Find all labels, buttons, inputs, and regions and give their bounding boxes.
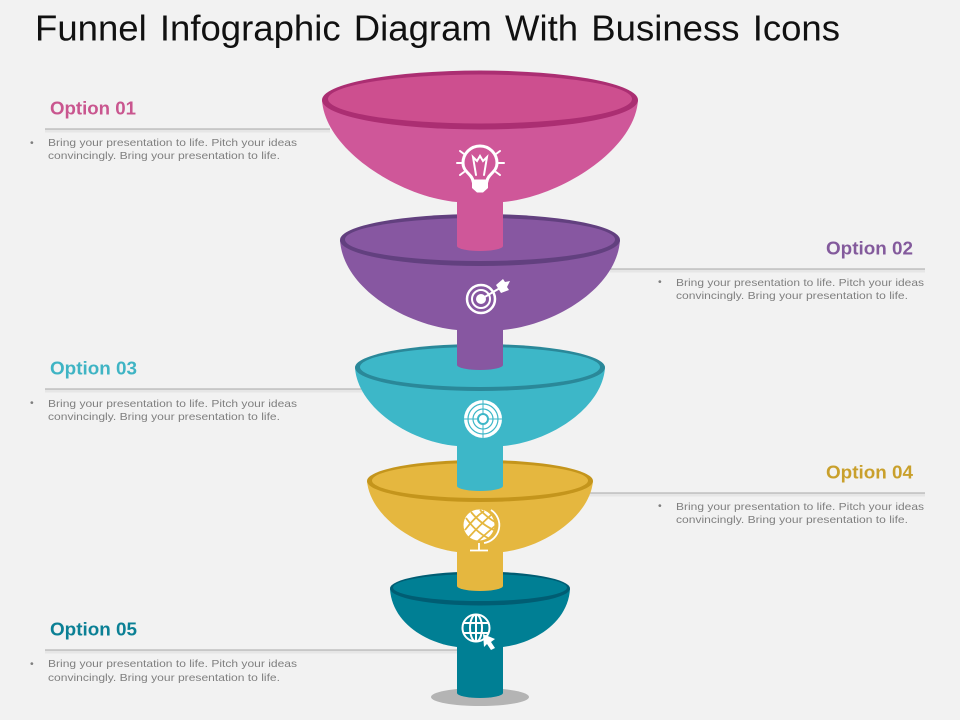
panel: option 01 text: convincingly. Bring your presentation to life. [48,150,280,162]
panel: option 05 text [30,620,460,684]
panel: option 05 text: Option 05 [50,620,137,640]
panel: option 03 text: Bring your presentation to life. Pitch your ideas [48,398,297,410]
panel: option 04 text: Bring your presentation to life. Pitch your ideas [676,501,924,513]
panel: option 01 text: Option 01 [50,98,136,118]
panel: option 04 text: convincingly. Bring your presentation to life. [676,514,908,526]
icon: round target [464,400,502,438]
panel: option 02 text: • [658,276,662,288]
panel: option 03 text: Option 03 [50,358,137,378]
panel: option 03 text [30,358,365,423]
funnel 1: pink [322,70,638,251]
icon: desk globe [464,510,499,550]
panel: option 02 text: Bring your presentation to life. Pitch your ideas [676,277,924,289]
panel: option 04 text: Option 04 [826,462,913,482]
panel: option 04 text: • [658,500,662,512]
panel: option 01 text [30,98,330,162]
panel: option 02 text: Option 02 [826,238,913,258]
panel: option 01 text: Bring your presentation to life. Pitch your ideas [48,137,297,149]
funnel 3: teal [355,344,605,491]
icon: light bulb [457,146,504,192]
panel: option 05 text: convincingly. Bring your presentation to life. [48,672,280,684]
funnel 5: dark teal [390,572,570,698]
panel: option 03 text: • [30,397,34,409]
panel: option 01 text: • [30,137,34,149]
panel: option 05 text: Bring your presentation to life. Pitch your ideas [48,658,297,670]
icon: target with arrow [467,279,510,313]
panel: option 02 text: convincingly. Bring your presentation to life. [676,290,908,302]
base shadow [431,688,529,706]
title: Funnel Infographic Diagram With Business Icons [35,8,840,48]
panel: option 04 text [585,462,925,526]
panel: option 03 text: convincingly. Bring your presentation to life. [48,411,280,423]
panel: option 05 text: • [30,658,34,670]
panel: option 02 text [610,238,925,302]
funnel 2: purple [340,214,620,370]
funnel 4: yellow [367,460,593,591]
icon: web globe with cursor [462,614,495,650]
